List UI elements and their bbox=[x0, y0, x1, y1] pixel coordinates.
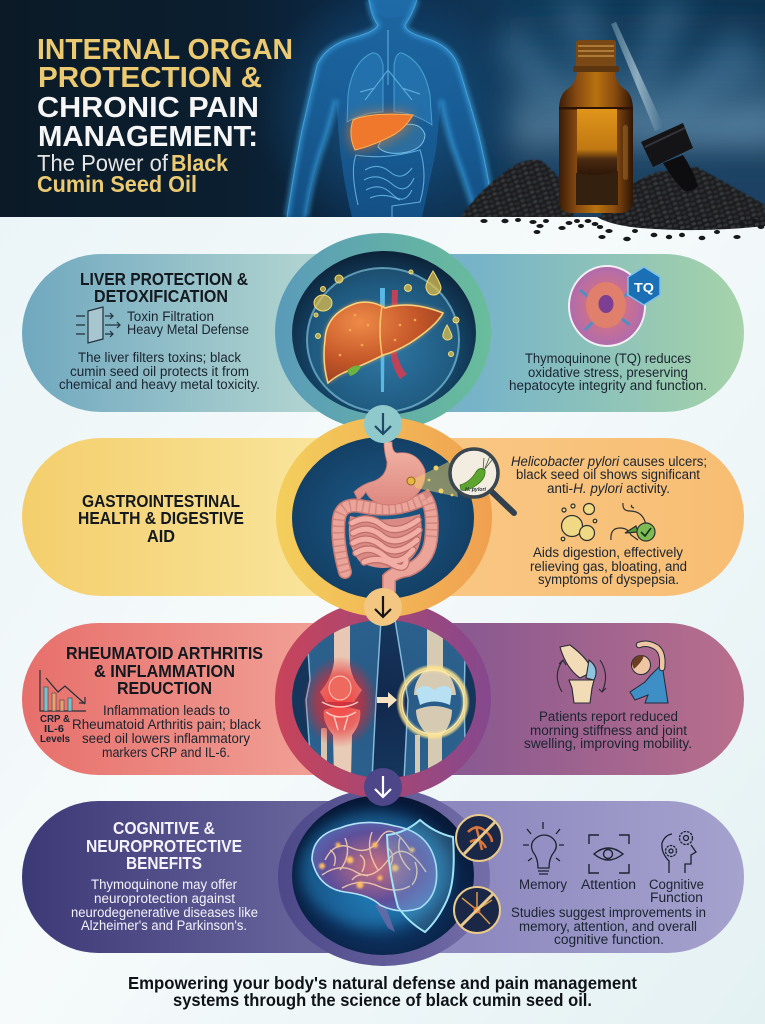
icon: glowing liver bbox=[351, 114, 413, 150]
heading: gastrointestinal: HEALTH & DIGESTIVE bbox=[78, 508, 244, 528]
heading: gastrointestinal: AID bbox=[147, 526, 175, 546]
icon: stretching person bbox=[630, 644, 668, 703]
title: The Power of bbox=[37, 150, 169, 176]
text block: thymoquinone description: oxidative stress, preserving bbox=[528, 365, 688, 380]
title: Black bbox=[171, 150, 228, 176]
text block: studies description: cognitive function. bbox=[554, 932, 664, 947]
icon: glass dropper bbox=[611, 22, 698, 191]
icon: blood vessels bbox=[380, 288, 385, 392]
text block: liver heading bbox=[80, 269, 248, 306]
text block: mobility description: Patients report reduced bbox=[539, 709, 678, 724]
panel: liver protection pill bbox=[22, 254, 744, 412]
text block: neuroprotection description: neuroprotection against bbox=[94, 891, 235, 906]
icon: memory light bulb bbox=[523, 822, 564, 874]
icon: glass sphere bbox=[307, 268, 459, 412]
text block: digestion description bbox=[530, 545, 687, 587]
icon: hepatocyte cell with TQ badge bbox=[569, 266, 660, 346]
text block: cognitive icon labels: Cognitive bbox=[649, 877, 704, 892]
arrow: liver to gut bbox=[364, 405, 402, 443]
icon: attention eye bbox=[589, 835, 629, 873]
cognitive medallion bbox=[278, 788, 490, 966]
header banner bbox=[0, 0, 765, 240]
text block: thymoquinone description bbox=[509, 351, 707, 393]
text block: inflammation description: markers CRP and IL-6. bbox=[102, 745, 230, 760]
text block: liver heading: DETOXIFICATION bbox=[94, 286, 228, 306]
text block: chart label bbox=[40, 714, 70, 745]
footer tagline bbox=[128, 973, 637, 1010]
text block: chart label: IL-6 bbox=[44, 724, 64, 735]
text block: neuroprotection description bbox=[71, 877, 258, 933]
text block: liver description bbox=[59, 350, 260, 392]
text block: studies description bbox=[511, 905, 706, 947]
panel: gastrointestinal pill bbox=[22, 438, 744, 596]
text block: H. pylori description: Helicobacter pylori causes ulcers; bbox=[511, 454, 707, 469]
text block: digestion description: Aids digestion, effectively bbox=[533, 545, 683, 560]
heading: cognitive: COGNITIVE & bbox=[113, 818, 215, 838]
icon: magnified bacteria bbox=[407, 449, 514, 513]
text block: H. pylori description: anti-H. pylori activity. bbox=[547, 481, 670, 496]
footer tagline: systems through the science of black cumin seed oil. bbox=[173, 990, 592, 1010]
icon: oil droplets and bubbles bbox=[314, 270, 459, 356]
icon: stomach in body bbox=[378, 124, 425, 153]
text block: cognitive icon labels: Attention bbox=[581, 877, 636, 892]
heading: cognitive: BENEFITS bbox=[126, 853, 202, 873]
gastrointestinal medallion bbox=[276, 417, 514, 617]
text block: thymoquinone description: Thymoquinone (TQ) reduces bbox=[525, 351, 691, 366]
text block: mobility description bbox=[524, 709, 692, 751]
icon: stomach with check bbox=[611, 503, 655, 541]
text block: liver benefits list: Heavy Metal Defense bbox=[127, 322, 249, 337]
spilled seeds bbox=[480, 217, 765, 241]
icon: intestines in body bbox=[353, 150, 424, 217]
icon: glowing brain bbox=[300, 812, 450, 932]
title: MANAGEMENT: bbox=[38, 121, 258, 153]
text block: H. pylori description: black seed oil shows significant bbox=[516, 467, 700, 482]
text block: studies description: memory, attention, and overall bbox=[519, 919, 697, 934]
liver medallion bbox=[275, 233, 491, 431]
knee medallion bbox=[275, 600, 491, 798]
icon: knee joint with motion arrows bbox=[557, 645, 606, 703]
heading: rheumatoid arthritis: & INFLAMMATION bbox=[94, 661, 235, 681]
text block: cognitive icon labels bbox=[519, 877, 704, 905]
text block: liver description: chemical and heavy metal toxicity. bbox=[59, 377, 260, 392]
title: PROTECTION & bbox=[38, 62, 262, 94]
text block: inflammation description: Rheumatoid Arthritis pain; black bbox=[72, 717, 261, 732]
title: Cumin Seed Oil bbox=[37, 171, 197, 197]
text block: chart label: CRP & bbox=[40, 714, 70, 725]
text block: digestion description: symptoms of dyspepsia. bbox=[538, 572, 679, 587]
text block: liver heading: LIVER PROTECTION & bbox=[80, 269, 248, 289]
text block: neuroprotection description: Thymoquinone may offer bbox=[91, 877, 237, 892]
text block: neuroprotection description: neurodegenerative diseases like bbox=[71, 905, 258, 920]
text block: liver description: cumin seed oil protects it from bbox=[70, 364, 249, 379]
icon: stomach bbox=[354, 442, 425, 505]
heading: cognitive bbox=[86, 818, 242, 873]
icon: seed piles bbox=[462, 160, 765, 222]
icon: cognitive head with gears bbox=[662, 832, 696, 873]
text block: inflammation description bbox=[72, 703, 261, 760]
icon: amber oil bottle bbox=[559, 40, 633, 213]
text block: liver benefits list: Toxin Filtration bbox=[127, 309, 214, 324]
panel: rheumatoid arthritis pill bbox=[22, 623, 744, 775]
footer tagline: Empowering your body's natural defense and pain management bbox=[128, 973, 637, 993]
title bbox=[37, 34, 293, 197]
text block: cognitive icon labels: Function bbox=[650, 890, 703, 905]
icon: toxin filter bbox=[76, 307, 120, 343]
arrow: gut to joints bbox=[364, 588, 402, 626]
heading: gastrointestinal bbox=[78, 491, 244, 546]
text block: thymoquinone description: hepatocyte integrity and function. bbox=[509, 378, 707, 393]
text block: neuroprotection description: Alzheimer's and Parkinson's. bbox=[81, 918, 247, 933]
title: INTERNAL ORGAN bbox=[37, 34, 293, 66]
text block: digestion description: relieving gas, bloating, and bbox=[530, 559, 687, 574]
icon: intestines bbox=[338, 498, 432, 590]
icon: improvement arrow bbox=[377, 692, 397, 708]
heading: rheumatoid arthritis bbox=[66, 643, 263, 698]
heading: gastrointestinal: GASTROINTESTINAL bbox=[82, 491, 240, 511]
text block: chart label: Levels bbox=[40, 734, 70, 745]
text block: cognitive icon labels: Memory bbox=[519, 877, 567, 892]
text block: liver description: The liver filters toxins; black bbox=[78, 350, 241, 365]
icon: healed knee bbox=[395, 620, 470, 780]
heading: rheumatoid arthritis: RHEUMATOID ARTHRITIS bbox=[66, 643, 263, 663]
text block: inflammation description: seed oil lowers inflammatory bbox=[82, 731, 250, 746]
icon: glowing human body bbox=[268, 0, 501, 217]
heading: cognitive: NEUROPROTECTIVE bbox=[86, 836, 242, 856]
title: CHRONIC PAIN bbox=[37, 92, 259, 124]
icon: crossed plaque badge bbox=[456, 815, 502, 861]
text block: H. pylori description bbox=[511, 454, 707, 496]
text block: inflammation description: Inflammation leads to bbox=[103, 703, 230, 718]
icon: lungs bbox=[347, 53, 432, 125]
icon: hepatocyte cell with TQ badge: TQ bbox=[634, 280, 654, 295]
icon: shield bbox=[387, 820, 454, 932]
chart: falling CRP and IL-6 levels bbox=[40, 670, 86, 711]
icon: liver bbox=[324, 302, 443, 383]
arrow: joints to brain bbox=[364, 768, 402, 806]
icon: crossed neuron badge bbox=[454, 887, 500, 933]
text block: studies description: Studies suggest improvements in bbox=[511, 905, 706, 920]
text block: mobility description: morning stiffness and joint bbox=[530, 723, 687, 738]
text block: liver benefits list bbox=[127, 309, 249, 337]
icon: magnified bacteria: H. pylori bbox=[465, 487, 486, 493]
heading: rheumatoid arthritis: REDUCTION bbox=[117, 678, 212, 698]
icon: gas bubbles bbox=[561, 504, 597, 541]
icon: inflamed knee bbox=[302, 620, 381, 780]
text block: mobility description: swelling, improving mobility. bbox=[524, 736, 692, 751]
panel: cognitive pill bbox=[22, 801, 744, 953]
